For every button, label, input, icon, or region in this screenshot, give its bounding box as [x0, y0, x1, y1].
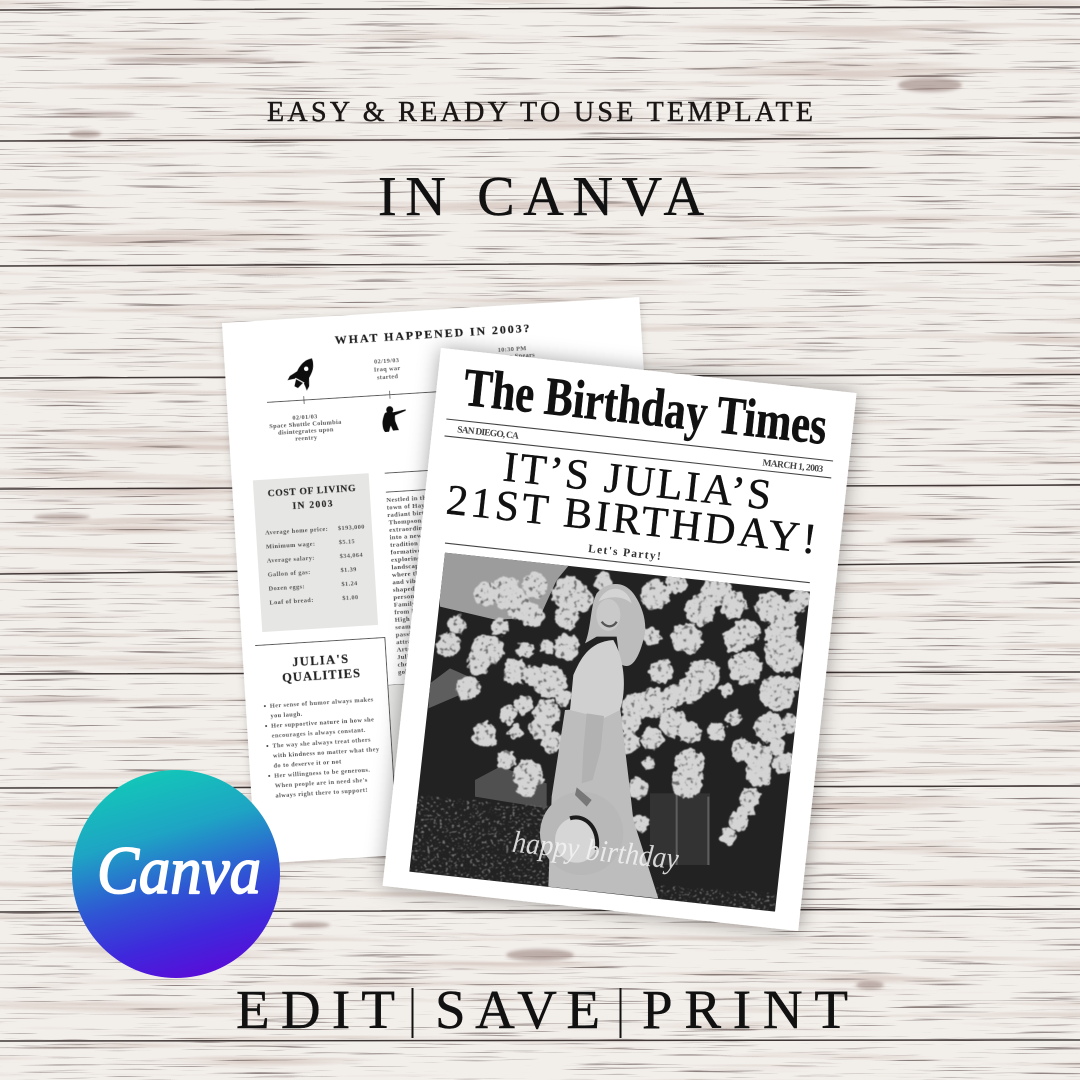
panel: cost of living: $1.00	[342, 594, 359, 602]
panel: cost of living: $34,064	[340, 552, 364, 560]
panel: Julia's qualities: Her supportive nature in how she	[271, 716, 374, 730]
panel: Julia's qualities: with kindness no matter what they	[273, 746, 380, 760]
masthead rules	[433, 419, 833, 584]
timeline event: Iraq war: Iraq war	[374, 365, 401, 374]
article column: Nestled in the heart	[386, 493, 449, 504]
panel: cost of living: Average salary:	[267, 555, 315, 565]
headline	[444, 438, 823, 564]
article column: seamless	[395, 623, 422, 631]
footer: edit save print	[236, 979, 848, 1040]
icon: soldier	[381, 405, 407, 432]
timeline event: Britney Spears: 10:30 PM	[498, 345, 527, 354]
panel: Julia's qualities: When people are in need she's	[275, 777, 368, 790]
panel: Julia's qualities: QUALITIES	[282, 666, 360, 685]
article column: into a new era of	[389, 531, 443, 541]
grey panel behind front sheet	[388, 679, 508, 855]
article column	[386, 493, 460, 676]
headline: 21ST BIRTHDAY!	[444, 477, 819, 564]
footer: edit save print: EDIT	[236, 979, 395, 1040]
panel: Julia's qualities: The way she always treat others	[272, 737, 371, 750]
panel: Julia's qualities: do to deserve it or not	[273, 758, 342, 770]
timeline	[267, 377, 605, 406]
timeline event: Britney Spears	[490, 345, 536, 368]
article column: extraordinary life	[389, 524, 446, 534]
panel: cost of living: $1.24	[341, 580, 358, 588]
article column: where the	[392, 570, 423, 579]
timeline event: Columbia	[269, 412, 343, 444]
woman in white dress	[548, 584, 658, 898]
ground petals	[407, 795, 777, 912]
article column: town of Hayden, a	[387, 501, 445, 512]
timeline event: Britney Spears: Britney Spears	[490, 352, 535, 361]
article column: Thompson, whose	[389, 516, 445, 527]
panel: cost of living: Average home price:	[265, 526, 328, 537]
front sheet: newspaper cover	[383, 348, 857, 931]
panel: cost of living: $193,000	[338, 524, 365, 532]
panel: cost of living: Dozen eggs:	[268, 583, 305, 593]
dateline: March 1 2003: MARCH 1, 2003	[762, 458, 824, 475]
straw hat	[540, 788, 600, 862]
panel: Julia's qualities: Her sense of humor always makes	[270, 696, 374, 710]
footer: edit save print: SAVE	[435, 979, 600, 1040]
article column: shaped her	[393, 585, 428, 594]
panel: cost of living: Gallon of gas:	[268, 569, 311, 579]
article column: and vibrant	[392, 577, 430, 586]
panel: Julia's qualities: you laugh.	[270, 711, 303, 720]
article column: personality	[393, 592, 429, 601]
badge: Canva logo: Canva	[97, 832, 261, 908]
article rules	[375, 458, 634, 685]
headline: IT’S JULIA’S	[501, 444, 773, 519]
timeline event: Columbia: 02/01/03	[292, 413, 318, 422]
back sheet: what happened in 2003	[222, 297, 673, 864]
article column: Julia	[397, 653, 413, 661]
article column: chose	[397, 661, 415, 669]
article column: radiant birth took	[387, 509, 445, 519]
badge: Canva logo	[72, 770, 280, 978]
article column: Arts	[396, 646, 411, 654]
masthead: The Birthday Times: The Birthday Times	[461, 357, 830, 456]
article column: Family	[394, 600, 416, 609]
heading: in canva: IN CANVA	[378, 166, 705, 228]
icon: rocket	[287, 353, 322, 392]
article column: High	[395, 616, 410, 624]
footer: edit save print: PRINT	[642, 979, 848, 1040]
script: happy birthday: happy birthday	[511, 825, 681, 876]
panel: Julia's qualities	[255, 637, 398, 863]
timeline event: Columbia: disintegrates upon	[278, 426, 334, 437]
article column: gold	[398, 668, 412, 676]
panel: cost of living: $5.15	[339, 538, 355, 546]
article column: tradition and her	[390, 539, 445, 549]
timeline event: Columbia: reentry	[295, 434, 318, 443]
panel: cost of living: COST OF LIVING	[267, 483, 356, 499]
article column: attracted	[396, 638, 425, 646]
panel: cost of living: $1.39	[340, 566, 357, 574]
timeline event: Iraq war	[373, 357, 401, 382]
timeline event: Columbia: Space Shuttle Columbia	[269, 419, 342, 430]
photo: woman among white roses	[400, 550, 820, 920]
timeline event: Britney Spears: kissed a girl	[495, 359, 532, 368]
panel: Julia's qualities: encourages is always constant.	[272, 727, 366, 740]
dateline: San Diego: SAN DIEGO, CA	[457, 425, 520, 442]
article column: landscapes	[391, 562, 426, 571]
panel: cost of living: IN 2003	[292, 498, 333, 512]
panel: Julia's qualities: Her willingness to be generous.	[274, 767, 371, 780]
article column: exploring the	[391, 554, 433, 564]
rose clusters	[439, 575, 808, 842]
panel: cost of living: Loaf of bread:	[269, 597, 314, 607]
wall and roof	[440, 550, 573, 620]
article column: passion	[396, 630, 419, 639]
back sheet title: WHAT HAPPENED IN 2003?	[334, 321, 530, 347]
panel: Julia's qualities: JULIA'S	[292, 652, 349, 669]
timeline event: Iraq war: started	[377, 373, 399, 381]
article column: formative years	[390, 546, 440, 556]
article column: from her	[394, 608, 422, 616]
panel: cost of living	[253, 473, 378, 632]
subhead: Let's Party: Let's Party!	[587, 543, 661, 563]
panel: cost of living: Minimum wage:	[266, 541, 316, 551]
heading: easy and ready to use template: EASY & READY TO USE TEMPLATE	[267, 97, 813, 128]
panel: Julia's qualities: always right there to support!	[275, 787, 368, 800]
timeline event: Iraq war: 02/19/03	[374, 357, 399, 366]
